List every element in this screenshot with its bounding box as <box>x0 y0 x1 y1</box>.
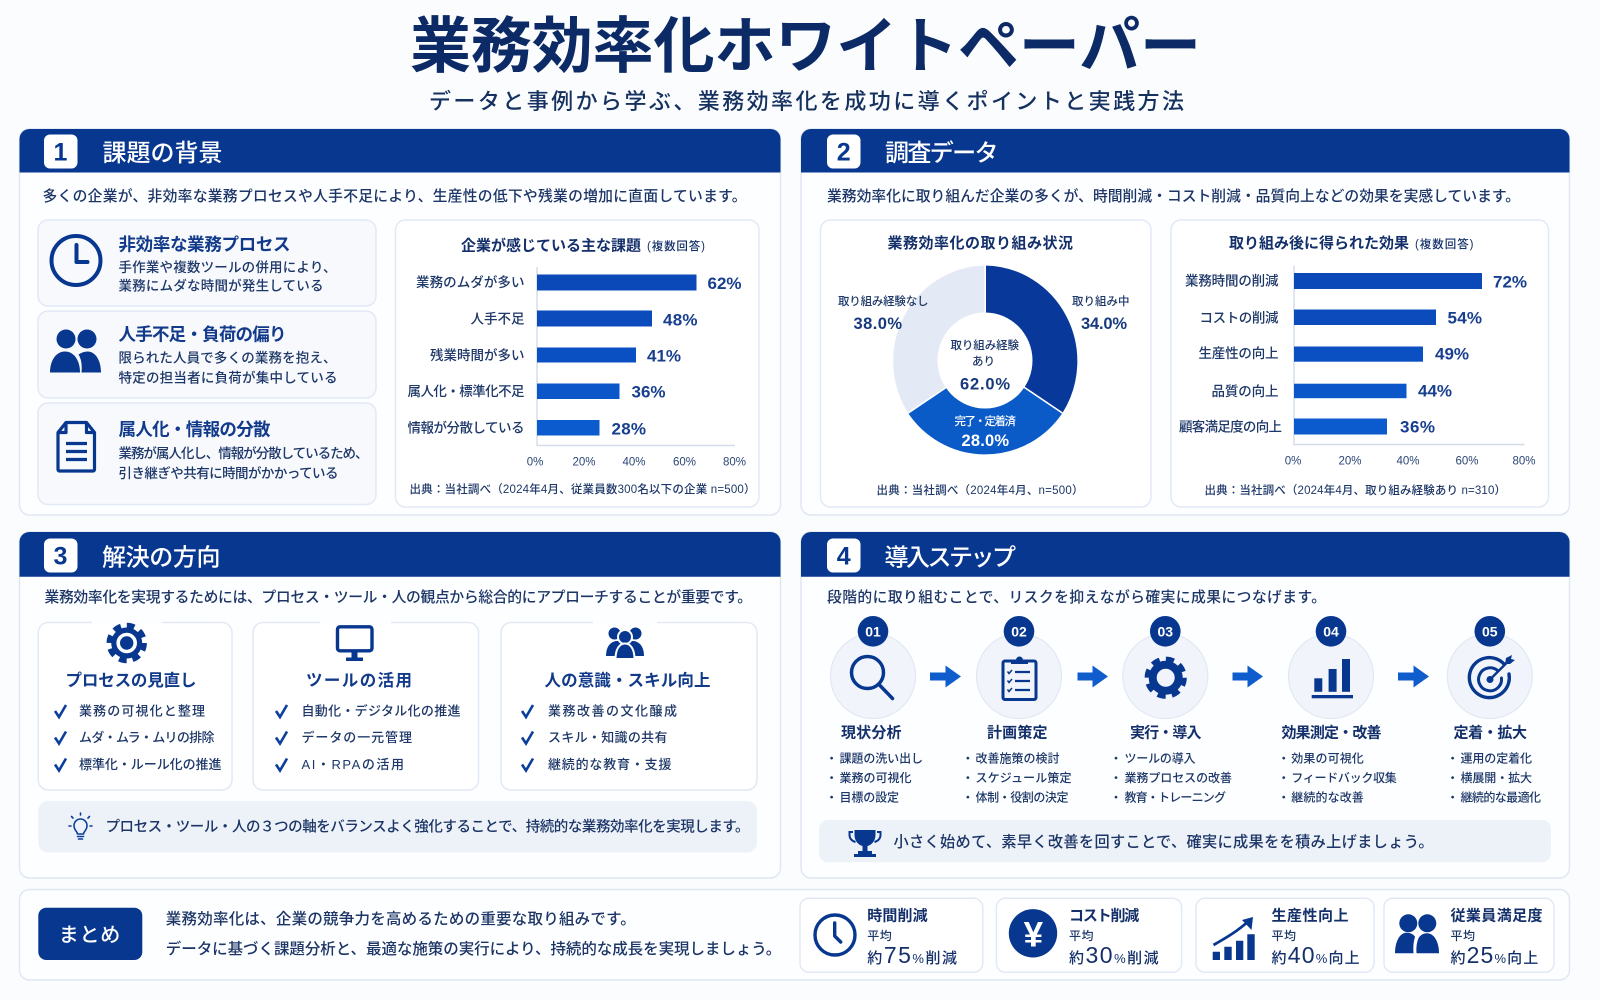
arrow <box>930 666 961 688</box>
step 05: 定着・拡大: ・ <box>1447 771 1459 785</box>
KPI: 従業員満足度: 平均 <box>1450 928 1475 943</box>
chart: 企業が感じている主な課題: 企業が感じている主な課題 <box>461 236 641 254</box>
step 04: 効果測定・改善: 継続的な改善 <box>1291 790 1364 805</box>
KPI: 時間削減: 時間削減 <box>867 906 928 924</box>
step 01: 現状分析: 目標の設定 <box>840 790 899 805</box>
chart: 取り組み後に得られた効果: 出典：当社調べ（2024年4月、取り組み経験あり n=310） <box>1204 483 1506 497</box>
step 01: 現状分析: 01 <box>865 623 881 639</box>
chart: 業務効率化の取り組み状況 donut: 取り組み中 <box>1072 294 1130 308</box>
step 05: 定着・拡大: ・ <box>1447 791 1459 805</box>
icon: gear <box>110 626 144 660</box>
chart: 取り組み後に得られた効果: 60% <box>1455 456 1479 468</box>
step 02: 計画策定: ・ <box>962 771 974 785</box>
panel 4 header: 導入ステップ <box>884 545 1016 572</box>
icon: monitor <box>338 627 372 661</box>
chart: 業務効率化の取り組み状況 donut: 完了・定着済 <box>954 414 1016 428</box>
chart: 業務効率化の取り組み状況 donut: 34.0% <box>1081 315 1127 333</box>
KPI: 生産性向上: 生産性向上 <box>1272 906 1348 924</box>
chart: 取り組み後に得られた効果 <box>1171 220 1548 507</box>
chart: 企業が感じている主な課題: 60% <box>673 457 696 469</box>
panel 3 intro text: 業務効率化を実現するためには、プロセス・ツール・人の観点から総合的にアプローチすることが重要です。 <box>44 588 752 606</box>
card: 非効率な業務プロセス <box>38 220 376 306</box>
KPI: 従業員満足度: 約25%向上 <box>1450 942 1538 968</box>
chart: 企業が感じている主な課題: 48% <box>663 311 698 330</box>
chart: 企業が感じている主な課題: 28% <box>612 420 646 439</box>
step 02: 計画策定: ・ <box>962 791 974 805</box>
panel 2 header <box>801 129 1570 172</box>
card: ツールの活用 <box>253 620 478 790</box>
chart: 業務効率化の取り組み状況 donut: 取り組み経験なし <box>838 294 928 308</box>
chart: 取り組み後に得られた効果: 44% <box>1418 382 1452 401</box>
KPI: 生産性向上 <box>1196 898 1374 972</box>
KPI: 時間削減 <box>800 898 983 972</box>
icon: growth chart <box>1213 917 1255 960</box>
step 04: 効果測定・改善 <box>1278 616 1397 805</box>
panel 2 header: 2 <box>837 138 851 166</box>
arrow <box>1232 666 1263 688</box>
card: 人手不足・負荷の偏り: 限られた人員で多くの業務を抱え、 <box>118 350 336 366</box>
card: 人手不足・負荷の偏り: 特定の担当者に負荷が集中している <box>118 370 338 386</box>
step 04: 効果測定・改善: 効果の可視化 <box>1291 751 1364 765</box>
panel 1 intro text: 多くの企業が、非効率な業務プロセスや人手不足により、生産性の低下や残業の増加に直面しています。 <box>42 187 746 205</box>
icon: light bulb <box>69 813 92 839</box>
title: 業務効率化ホワイトペーパー <box>410 12 1201 80</box>
callout: 3つの軸: プロセス・ツール・人の３つの軸をバランスよく強化することで、持続的な業務効率化を実現します。 <box>106 817 750 835</box>
step 02: 計画策定: 体制・役割の決定 <box>976 790 1068 805</box>
chart: 企業が感じている主な課題: 属人化・標準化不足 <box>408 384 525 399</box>
panel 2 header: 調査データ <box>885 139 998 167</box>
step 03: 実行・導入: 教育・トレーニング <box>1124 790 1226 805</box>
KPI: コスト削減: 約30%削減 <box>1069 942 1159 968</box>
card: プロセスの見直し: 標準化・ルール化の推進 <box>79 757 222 772</box>
summary text: 業務効率化は、企業の競争力を高めるための重要な取り組みです。 <box>166 910 636 928</box>
panel 4 header: 4 <box>837 542 851 570</box>
step 03: 実行・導入 <box>1110 616 1232 805</box>
KPI: 時間削減: 約75%削減 <box>867 942 957 968</box>
icon: trophy <box>850 830 880 857</box>
panel 4: 導入ステップ <box>801 532 1570 878</box>
panel: まとめ <box>20 890 1570 980</box>
icon: gear <box>1148 660 1184 696</box>
chart: 取り組み後に得られた効果: コストの削減 <box>1200 310 1279 326</box>
summary text: データに基づく課題分析と、最適な施策の実行により、持続的な成長を実現しましょう。 <box>166 939 781 958</box>
step 02: 計画策定 <box>962 616 1072 805</box>
chart: 取り組み後に得られた効果: 72% <box>1493 272 1527 291</box>
label: まとめ: まとめ <box>59 924 120 946</box>
card: 人の意識・スキル向上: 人の意識・スキル向上 <box>544 671 710 690</box>
icon: clock <box>52 236 100 285</box>
step 01: 現状分析: ・ <box>826 751 838 765</box>
card: プロセスの見直し: ムダ・ムラ・ムリの排除 <box>79 730 214 745</box>
chart: 取り組み後に得られた効果: 54% <box>1448 309 1482 328</box>
chart: 業務効率化の取り組み状況 donut: 28.0% <box>962 432 1009 450</box>
KPI: コスト削減 <box>996 898 1182 972</box>
step 03: 実行・導入: ・ <box>1110 791 1122 805</box>
step 01: 現状分析: 課題の洗い出し <box>840 750 923 765</box>
KPI: 従業員満足度 <box>1384 898 1554 972</box>
chart: 取り組み後に得られた効果: 40% <box>1396 456 1420 468</box>
step 02: 計画策定: ・ <box>962 751 974 765</box>
panel 2: 調査データ <box>801 129 1570 515</box>
panel 3 header <box>20 532 780 577</box>
chart: 企業が感じている主な課題: 業務のムダが多い <box>416 274 524 290</box>
card: 人の意識・スキル向上: 継続的な教育・支援 <box>548 757 672 772</box>
icon: target <box>1469 655 1515 698</box>
step 03: 実行・導入: ツールの導入 <box>1124 750 1196 765</box>
panel 1 header <box>20 129 780 172</box>
card: ツールの活用: ツールの活用 <box>306 671 412 690</box>
card: 非効率な業務プロセス: 非効率な業務プロセス <box>118 234 290 254</box>
panel 2 intro text: 業務効率化に取り組んだ企業の多くが、時間削減・コスト削減・品質向上などの効果を実感しています。 <box>827 187 1520 205</box>
card: ツールの活用: 自動化・デジタル化の推進 <box>302 704 460 718</box>
step 03: 実行・導入: ・ <box>1110 751 1122 765</box>
chart: 業務効率化の取り組み状況 donut: 業務効率化の取り組み状況 <box>888 234 1073 252</box>
step 04: 効果測定・改善: ・ <box>1278 751 1290 765</box>
chart: 取り組み後に得られた効果: 取り組み後に得られた効果 <box>1229 234 1409 252</box>
step 02: 計画策定: 02 <box>1011 623 1027 639</box>
step 05: 定着・拡大: 運用の定着化 <box>1460 750 1532 765</box>
chart: 業務効率化の取り組み状況 donut: 38.0% <box>854 315 902 333</box>
chart: 企業が感じている主な課題: 0% <box>527 457 543 469</box>
step 01: 現状分析: ・ <box>826 771 838 785</box>
icon: yen: ¥ <box>1024 916 1044 954</box>
step 04: 効果測定・改善: 04 <box>1323 623 1339 639</box>
step 02: 計画策定: スケジュール策定 <box>976 770 1072 785</box>
chart: 取り組み後に得られた効果: 業務時間の削減 <box>1185 272 1279 288</box>
callout: 小さく始めて <box>819 820 1551 862</box>
card: 属人化・情報の分散: 業務が属人化し、情報が分散しているため、 <box>118 445 368 461</box>
card: プロセスの見直し: プロセスの見直し <box>66 671 196 690</box>
chart: 業務効率化の取り組み状況 donut: 取り組み経験 <box>950 338 1020 352</box>
card: 人手不足・負荷の偏り: 人手不足・負荷の偏り <box>118 324 286 344</box>
chart: 取り組み後に得られた効果: 品質の向上 <box>1212 383 1278 399</box>
KPI: 生産性向上: 平均 <box>1272 928 1296 943</box>
panel 1 header: 1 <box>54 138 68 166</box>
step 02: 計画策定: 改善施策の検討 <box>976 750 1060 765</box>
chart: 業務効率化の取り組み状況 donut: あり <box>972 355 995 368</box>
icon: people <box>50 330 101 372</box>
KPI: コスト削減: コスト削減 <box>1069 906 1139 924</box>
step 05: 定着・拡大: 05 <box>1482 623 1498 639</box>
chart: 企業が感じている主な課題: 情報が分散している <box>408 420 524 436</box>
step 01: 現状分析: 現状分析 <box>841 724 902 742</box>
chart: 企業が感じている主な課題: 36% <box>632 383 666 402</box>
chart: 取り組み後に得られた効果: 36% <box>1400 418 1435 437</box>
step 03: 実行・導入: 実行・導入 <box>1130 724 1202 742</box>
panel 3: 解決の方向 <box>20 532 780 878</box>
panel 4 header <box>801 532 1570 577</box>
icon: yen <box>1009 909 1057 958</box>
arrow <box>1398 666 1429 688</box>
chart: 企業が感じている主な課題: 41% <box>647 347 681 366</box>
icon: clipboard <box>1003 657 1036 700</box>
step 03: 実行・導入: ・ <box>1110 771 1122 785</box>
chart: 取り組み後に得られた効果: 80% <box>1512 456 1536 468</box>
summary text <box>166 910 781 958</box>
card: ツールの活用: データの一元管理 <box>302 730 412 745</box>
KPI: 従業員満足度: 従業員満足度 <box>1450 906 1542 924</box>
panel 4 intro text: 段階的に取り組むことで、リスクを抑えながら確実に成果につなげます。 <box>827 588 1326 606</box>
icon: document <box>58 422 94 471</box>
step 01: 現状分析: 業務の可視化 <box>840 770 912 785</box>
KPI: 生産性向上: 約40%向上 <box>1272 942 1360 968</box>
chart: 企業が感じている主な課題: 残業時間が多い <box>430 347 524 363</box>
panel 1: 課題の背景 <box>20 129 780 515</box>
icon: clock <box>815 915 855 955</box>
card: 属人化・情報の分散 <box>38 403 376 504</box>
card: ツールの活用: AI・RPAの活用 <box>302 757 404 772</box>
step 05: 定着・拡大: 横展開・拡大 <box>1460 770 1532 785</box>
icon: people <box>1395 914 1439 953</box>
icon: magnifier <box>852 656 892 698</box>
card: 人手不足・負荷の偏り <box>38 311 376 398</box>
step 05: 定着・拡大: 継続的な最適化 <box>1460 790 1541 805</box>
icon: bar chart <box>1312 659 1353 698</box>
card: 非効率な業務プロセス: 業務にムダな時間が発生している <box>118 278 324 294</box>
step 05: 定着・拡大: ・ <box>1447 751 1459 765</box>
step 01: 現状分析: ・ <box>826 791 838 805</box>
icon: group of people <box>606 628 644 659</box>
chart: 企業が感じている主な課題: 80% <box>723 457 746 469</box>
step 05: 定着・拡大: 定着・拡大 <box>1454 724 1527 742</box>
step 04: 効果測定・改善: 効果測定・改善 <box>1282 724 1382 742</box>
chart: 取り組み後に得られた効果: 0% <box>1285 456 1301 468</box>
step 04: 効果測定・改善: ・ <box>1278 771 1290 785</box>
card: プロセスの見直し: 業務の可視化と整理 <box>79 704 205 718</box>
chart: 企業が感じている主な課題: (複数回答) <box>647 239 705 253</box>
card: 属人化・情報の分散: 属人化・情報の分散 <box>118 420 271 440</box>
step 05: 定着・拡大 <box>1447 616 1541 805</box>
arrow <box>1078 666 1108 688</box>
KPI: 時間削減: 平均 <box>867 928 892 943</box>
step 01: 現状分析 <box>826 616 923 805</box>
callout: 3つの軸 <box>38 801 757 852</box>
card: 人の意識・スキル向上 <box>501 620 757 790</box>
card: 人の意識・スキル向上: スキル・知識の共有 <box>548 730 668 745</box>
chart: 業務効率化の取り組み状況 donut: 62.0% <box>960 376 1010 394</box>
step 04: 効果測定・改善: フィードバック収集 <box>1291 770 1397 785</box>
chart: 業務効率化の取り組み状況 donut <box>820 220 1151 507</box>
panel 3 header: 解決の方向 <box>102 544 220 571</box>
chart: 企業が感じている主な課題: 出典：当社調べ（2024年4月、従業員数300名以下の企業 n=500） <box>410 482 756 496</box>
step 04: 効果測定・改善: ・ <box>1278 791 1290 805</box>
chart: 取り組み後に得られた効果: 顧客満足度の向上 <box>1179 418 1282 434</box>
step 03: 実行・導入: 03 <box>1158 623 1173 639</box>
card: 属人化・情報の分散: 引き継ぎや共有に時間がかかっている <box>118 465 338 481</box>
chart: 企業が感じている主な課題 <box>396 220 759 507</box>
card: 人の意識・スキル向上: 業務改善の文化醸成 <box>548 704 677 718</box>
label: まとめ <box>38 908 142 960</box>
chart: 企業が感じている主な課題: 20% <box>572 457 596 469</box>
KPI: コスト削減: 平均 <box>1069 928 1094 943</box>
subtitle: データと事例から学ぶ、業務効率化を成功に導くポイントと実践方法 <box>429 89 1184 114</box>
chart: 業務効率化の取り組み状況 donut: 出典：当社調べ（2024年4月、n=500） <box>876 483 1084 497</box>
panel 1 header: 課題の背景 <box>102 140 222 167</box>
card: 非効率な業務プロセス: 手作業や複数ツールの併用により、 <box>118 259 336 275</box>
card: プロセスの見直し <box>38 620 232 790</box>
chart: 企業が感じている主な課題: 62% <box>708 274 742 293</box>
chart: 取り組み後に得られた効果: 生産性の向上 <box>1198 345 1278 361</box>
step 02: 計画策定: 計画策定 <box>987 724 1048 742</box>
callout: 小さく始めて: 小さく始めて、素早く改善を回すことで、確実に成果をを積み上げましょう。 <box>894 834 1434 851</box>
panel 3 header: 3 <box>54 542 67 570</box>
chart: 企業が感じている主な課題: 40% <box>622 457 646 469</box>
chart: 取り組み後に得られた効果: (複数回答) <box>1415 237 1474 251</box>
chart: 企業が感じている主な課題: 人手不足 <box>470 310 525 326</box>
step 03: 実行・導入: 業務プロセスの改善 <box>1124 770 1232 785</box>
chart: 取り組み後に得られた効果: 49% <box>1435 345 1469 364</box>
chart: 取り組み後に得られた効果: 20% <box>1338 456 1362 468</box>
